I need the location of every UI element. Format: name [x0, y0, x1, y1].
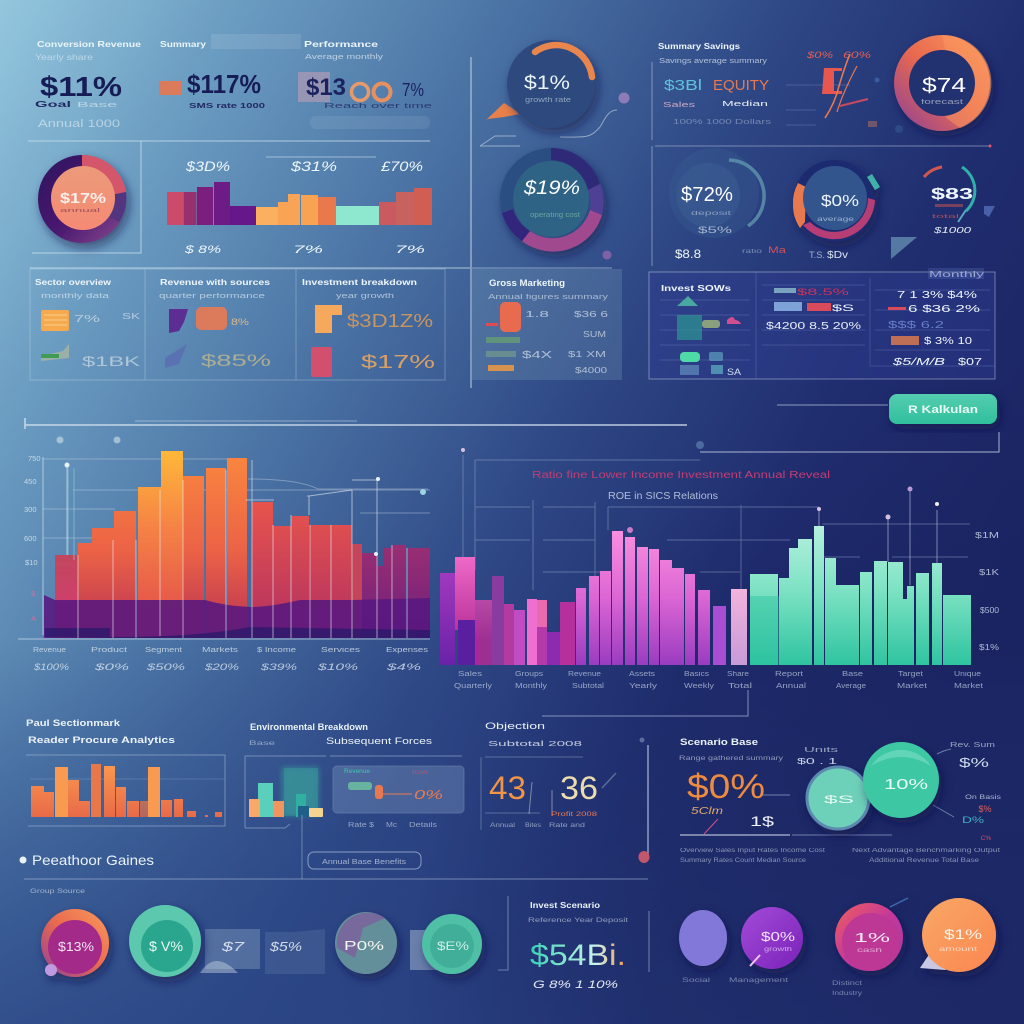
figure: 43: [489, 770, 526, 806]
bubble: large teal: 10%: [884, 776, 928, 793]
stat: first value: Goal: [35, 100, 71, 109]
category labels: Subtotal: [572, 683, 605, 690]
section: top-right summary: [652, 35, 995, 266]
category labels: Segment: [145, 647, 182, 654]
white separators and axis: [18, 457, 430, 639]
cell: right: 6 $36 2%: [908, 304, 980, 315]
heading: Reader Procure Analytics: [28, 735, 175, 746]
category labels: Unique: [954, 671, 981, 678]
panel: item A: [35, 278, 141, 369]
right axis labels: $1M: [975, 531, 1000, 540]
category labels: Sales: [458, 671, 483, 678]
bar chart: purple and teal: [440, 441, 1000, 716]
stat: first value: Conversion Revenue: [37, 39, 141, 49]
section frame lines: [28, 57, 612, 388]
axis labels: 600: [24, 534, 37, 543]
cell: left: SA: [727, 367, 741, 377]
stat: first value: [35, 39, 141, 130]
bars: [249, 767, 323, 817]
donut: left revenue: annual: [60, 208, 100, 214]
figure: 36: [560, 770, 598, 806]
panel: item B: Revenue with sources: [160, 278, 271, 287]
chart: line glyph: [786, 50, 871, 125]
connector and dot: [24, 738, 650, 879]
labels: [348, 822, 438, 829]
category labels: Assets: [629, 671, 656, 678]
heading: [26, 718, 175, 746]
label row under gauges: $Dv: [827, 250, 848, 261]
value labels above chart: $3D%: [185, 158, 230, 174]
heading: Subsequent Forces: [326, 736, 433, 746]
gauge: left: $8.8: [675, 247, 701, 261]
caption: Rate and: [549, 822, 586, 829]
chart: line glyph: 60%: [843, 50, 871, 60]
frame: [26, 755, 225, 826]
category labels: Target: [898, 671, 923, 678]
panel: item B: [159, 278, 271, 370]
circle: teal small: [422, 914, 482, 974]
dots: [652, 78, 903, 266]
circle: grey-violet: P0%: [344, 938, 385, 953]
category labels: Expenses: [386, 647, 429, 654]
glass values: $7: [220, 939, 245, 954]
heading: [488, 278, 609, 301]
circle: magenta: 1%: [854, 930, 891, 945]
big value: $0%: [687, 768, 765, 806]
gauge: right: $1000: [932, 226, 972, 235]
category labels: Groups: [515, 671, 544, 678]
donut: left revenue: $17%: [60, 190, 106, 207]
cell: middle: $8.5%: [797, 287, 849, 297]
section: top-left summary stats: [35, 34, 432, 130]
cell: right: $07: [958, 357, 983, 368]
category labels: Yearly: [629, 683, 658, 690]
rule lines above charts: [25, 405, 999, 452]
donut: top value: [507, 40, 595, 128]
heading: Median: [722, 99, 768, 108]
category labels: $ Income: [257, 647, 296, 654]
glass values: [220, 939, 302, 954]
labels below chart: [184, 244, 425, 256]
value labels above chart: $31%: [290, 158, 337, 174]
labels: Details: [409, 822, 438, 829]
value labels above chart: [185, 157, 423, 174]
gauge: middle: average: [817, 216, 855, 223]
labels below chart: 7%: [293, 244, 323, 256]
heading: EQUITY: [713, 77, 769, 94]
heading: Annual figures summary: [488, 294, 609, 301]
panel: item C: [302, 278, 435, 377]
button: green: R Kalkulan: [908, 404, 978, 416]
heading: Subtotal 2008: [488, 739, 582, 748]
chart headings: [532, 470, 830, 502]
chart headings: Ratio fine Lower Income Investment Annual Reveal: [532, 470, 830, 481]
rows: $4000: [575, 366, 608, 375]
glass callout: Revenue: [344, 769, 371, 775]
stat: third value: $13: [306, 74, 346, 101]
panel: item A: $1BK: [82, 353, 141, 369]
category labels: $39%: [259, 662, 297, 672]
mini notes: C%: [981, 835, 991, 842]
donut: large center: operating cost: [530, 212, 580, 219]
category labels: Report: [775, 671, 803, 678]
small notes: Overview Sales Input Rates Income Cost: [680, 848, 825, 854]
category labels: Revenue: [33, 647, 66, 654]
bubble: small teal: $S: [824, 794, 854, 806]
table lines: [660, 272, 995, 379]
heading: Percentage Gains: Peeathoor Gaines: [32, 852, 154, 868]
labels below chart: $ 8%: [184, 244, 221, 256]
circle row: bottom-right: [679, 898, 996, 997]
bar chart: top stacked bars: [167, 157, 432, 256]
big value: 1$: [750, 813, 774, 829]
captions: Social: [682, 977, 711, 984]
right axis labels: $1K: [979, 568, 1000, 577]
chart headings: ROE in SICS Relations: [608, 491, 718, 502]
category labels: $100%: [33, 662, 69, 672]
mini notes: $0 . 1: [797, 757, 838, 766]
category labels: $10%: [316, 662, 358, 672]
heading: Objection: [485, 721, 545, 732]
stat: first value: Annual 1000: [38, 118, 120, 130]
gauge: left: $5%: [698, 225, 732, 235]
panel: item A: Sector overview: [35, 278, 112, 287]
gauge: right: total: [932, 214, 959, 220]
mini notes: $%: [959, 755, 990, 770]
category labels: $0%: [93, 662, 129, 672]
caption: Group Source: [30, 888, 86, 895]
category labels: Markets: [202, 647, 239, 654]
glass callout: low: [412, 770, 429, 776]
grid and stems: [463, 455, 970, 595]
category labels: Services: [321, 647, 361, 654]
circle: purple: $0%: [761, 929, 796, 944]
panel: item A: SK: [122, 312, 141, 321]
heading: Reference Year Deposit: [528, 917, 628, 924]
category labels: Base: [842, 671, 863, 678]
cell: right: $5/M/B: [891, 357, 946, 368]
mini notes: $%: [978, 804, 992, 814]
section: middle top small donut: [480, 40, 630, 260]
category labels: [33, 647, 429, 672]
small notes: Summary Rates Count Median Source: [680, 858, 807, 864]
circle: grey-violet: [335, 912, 397, 974]
connector: [542, 690, 748, 716]
panel: item B: quarter performance: [159, 293, 265, 300]
circle: orange: [920, 898, 996, 972]
captions: Distinct: [832, 980, 862, 987]
big value: 5Clm: [691, 806, 723, 817]
panel: Gross margin list: [472, 269, 622, 380]
heading: Scenario Base: [680, 737, 758, 747]
caption: [490, 822, 586, 829]
circle: orange: amount: [939, 947, 978, 953]
rows: SUM: [583, 330, 606, 339]
heading: Savings average summary: [659, 58, 768, 65]
cell: right: [888, 290, 983, 368]
heading: [528, 900, 628, 924]
category labels: Market: [954, 683, 983, 690]
right axis labels: $1%: [979, 643, 999, 652]
glass callout: 0%: [414, 787, 443, 802]
frame: [245, 756, 462, 828]
glass callout: [333, 766, 464, 813]
big value: [680, 768, 790, 835]
bubble: large teal: [863, 742, 939, 818]
axis labels: $: [31, 589, 36, 598]
small notes: Additional Revenue Total Base: [869, 858, 980, 864]
bars: [31, 764, 222, 817]
stat: 43 36 big numbers: [24, 721, 650, 879]
panel: item C: Investment breakdown: [302, 278, 417, 287]
panel: item C: $17%: [361, 352, 435, 372]
heading: Paul Sectionmark: [26, 718, 121, 729]
donut: right: $74: [922, 75, 966, 97]
category labels: Revenue: [568, 671, 601, 678]
circle: magenta: [835, 898, 908, 971]
donut: large center: $19%: [523, 178, 580, 199]
circle: teal small: $E%: [437, 939, 469, 953]
stat: $54Bi: [528, 900, 649, 991]
connector lines: [480, 110, 617, 146]
category labels: Product: [91, 647, 127, 654]
heading: [679, 737, 784, 762]
gauge: right: [924, 167, 995, 235]
labels: Rate $: [348, 822, 374, 829]
heading: Environmental Breakdown: [250, 722, 368, 733]
panel: item A: monthly data: [41, 293, 109, 300]
rows: $4X: [522, 350, 553, 361]
value labels above chart: £70%: [380, 158, 423, 174]
category labels: Weekly: [684, 683, 715, 690]
mini notes: [762, 742, 1002, 842]
rows: [486, 302, 609, 375]
category labels: $4%: [385, 662, 421, 672]
heading: 100% 1000 Dollars: [673, 119, 772, 126]
gauge: middle: [793, 160, 880, 242]
heading: Base: [249, 740, 276, 747]
category labels: $50%: [145, 662, 185, 672]
stat: second value: [159, 34, 301, 110]
panel: item A: 7%: [74, 314, 100, 325]
circle: lavender: [679, 910, 727, 966]
panel: item B: 8%: [231, 317, 249, 327]
axis labels: 450: [24, 477, 37, 486]
stat: third value: Performance: [304, 39, 378, 49]
gauge: right: $83: [931, 186, 973, 203]
stat: third value: 7%: [402, 80, 424, 100]
purple bars: [440, 531, 747, 665]
category labels: Basics: [684, 671, 710, 678]
captions: Industry: [832, 990, 863, 997]
small notes: Next Advantage Benchmarking Output: [852, 848, 1000, 854]
panel: mini mixed bars: [245, 722, 464, 829]
donut: left revenue: [38, 155, 126, 243]
divider: [648, 911, 650, 972]
pins: [56, 436, 426, 556]
captions: [682, 977, 863, 997]
bars: [55, 451, 430, 638]
small notes: [680, 848, 1000, 864]
chart: line glyph: $0%: [806, 50, 833, 60]
heading: Invest Scenario: [530, 900, 600, 910]
button: green: [889, 394, 997, 424]
heading: [249, 722, 433, 747]
teal bars: [750, 526, 971, 665]
donut: right: [894, 35, 991, 131]
gauge: middle: $0%: [821, 193, 859, 210]
cell: middle: $4200 8.5 20%: [766, 321, 861, 332]
panel frame: [30, 269, 445, 380]
cell: left: Invest SOWs: [661, 283, 731, 293]
category labels: $20%: [204, 662, 239, 672]
glass band: [200, 929, 440, 974]
circle: teal: $ V%: [149, 938, 183, 954]
stat: third value: Average monthly: [305, 52, 383, 61]
label row under gauges: ratio: [742, 249, 763, 255]
orange wedge: [486, 103, 520, 120]
circle: purple: growth: [764, 947, 792, 953]
labels below chart: 7%: [395, 244, 425, 256]
right axis labels: [975, 531, 1000, 652]
label row under gauges: [742, 245, 848, 261]
stat: third value: [298, 39, 432, 129]
axis labels: A: [31, 614, 36, 623]
labels: Mc: [386, 822, 398, 829]
circle: orange-magenta: [41, 909, 109, 977]
panel: Scenario stats right: [679, 737, 1002, 864]
axis labels: 300: [24, 505, 37, 514]
donut: right: forecast: [921, 99, 963, 106]
tag above table: Monthly: [929, 270, 984, 279]
caption: Bites: [525, 822, 542, 829]
stat: first value: $11%: [40, 71, 122, 102]
cell: middle: $S: [832, 303, 854, 313]
axis labels: [24, 454, 41, 623]
figure: $54Bi.: [530, 939, 626, 972]
heading: [652, 41, 772, 140]
axis labels: $10: [25, 558, 38, 567]
rows: 1.8: [525, 310, 550, 319]
cell: right: $$$ 6.2: [888, 320, 945, 331]
mini notes: Units: [804, 747, 839, 754]
gauge: left: deposit: [691, 211, 732, 217]
pill label: [308, 852, 421, 869]
stat: second value: $117%: [187, 69, 261, 99]
cell: right: $ 3% 10: [924, 336, 973, 347]
figure: [489, 770, 616, 818]
cell: middle: [766, 287, 861, 332]
category labels: Monthly: [515, 683, 548, 690]
divider with dot: [655, 144, 992, 148]
category labels: Share: [727, 671, 749, 678]
category labels: Average: [836, 683, 866, 690]
stat: second value: Summary: [160, 39, 206, 49]
bars: [167, 182, 432, 225]
panel: Investment table: [649, 268, 995, 379]
decorative triangle: [891, 237, 917, 259]
bubble: small teal: [807, 767, 869, 829]
bar chart: left orange: [18, 436, 430, 672]
circle: orange: $1%: [944, 926, 982, 942]
panel: item C: $3D1Z%: [347, 311, 433, 331]
heading: $3Bl: [664, 77, 702, 94]
circle row: bottom-left: [30, 888, 508, 977]
mini notes: On Basis: [965, 794, 1002, 801]
rules: [481, 757, 583, 830]
category labels: Quarterly: [454, 683, 493, 690]
circle: teal: [129, 905, 201, 977]
category labels: Total: [728, 683, 753, 690]
right axis labels: $500: [980, 606, 1000, 615]
category labels: Market: [897, 683, 927, 690]
stat: first value: Yearly share: [35, 53, 94, 62]
category labels: [454, 671, 983, 690]
dots: [602, 92, 630, 260]
stat: second value: SMS rate 1000: [189, 101, 265, 110]
grid and axes: [43, 459, 430, 538]
glass values: $5%: [269, 939, 302, 954]
stat: third value: Reach over time: [324, 103, 432, 110]
label row under gauges: Ma: [768, 245, 786, 255]
gauge: left: $72%: [681, 184, 733, 206]
captions: Management: [729, 977, 788, 984]
axis labels: 750: [28, 454, 41, 463]
rows: $1 XM: [568, 350, 607, 359]
cell: left: [661, 283, 741, 377]
circle: purple: [741, 907, 803, 969]
panel: item C: year growth: [336, 293, 394, 300]
caption: Annual: [490, 822, 516, 829]
circle: magenta: cash: [857, 948, 882, 954]
heading: Range gathered summary: [679, 755, 784, 762]
cell: right: 7 1 3% $4%: [897, 290, 977, 301]
pill label: Annual Base Benefits: [322, 857, 406, 866]
tag above table: [928, 268, 984, 279]
heading: Sales: [663, 100, 695, 109]
gauge: left: [669, 148, 764, 261]
mini notes: D%: [962, 815, 984, 825]
donut: top value: growth rate: [525, 97, 571, 104]
rows: $36 6: [574, 310, 609, 319]
category labels: Annual: [776, 683, 807, 690]
purple base band: [44, 595, 430, 638]
figure: Profit 2008: [551, 811, 598, 818]
mini notes: Rev. Sum: [950, 742, 995, 749]
panel: mini orange bar chart: [26, 718, 225, 826]
heading: Gross Marketing: [489, 278, 565, 288]
heading: Summary Savings: [658, 41, 740, 51]
stems with markers: [819, 490, 937, 585]
panels: middle-left mini stat row: [30, 269, 445, 380]
vertical mark: [498, 896, 508, 970]
panel: item B: $85%: [201, 351, 271, 370]
circle: orange-magenta: $13%: [58, 939, 94, 954]
heading: [485, 721, 582, 748]
donut: large center: [500, 148, 604, 252]
stat: first value: Base: [77, 102, 117, 109]
donut: top value: $1%: [524, 73, 570, 94]
caption: G 8% 1 10%: [533, 979, 618, 991]
label row under gauges: T.S.: [809, 250, 825, 260]
